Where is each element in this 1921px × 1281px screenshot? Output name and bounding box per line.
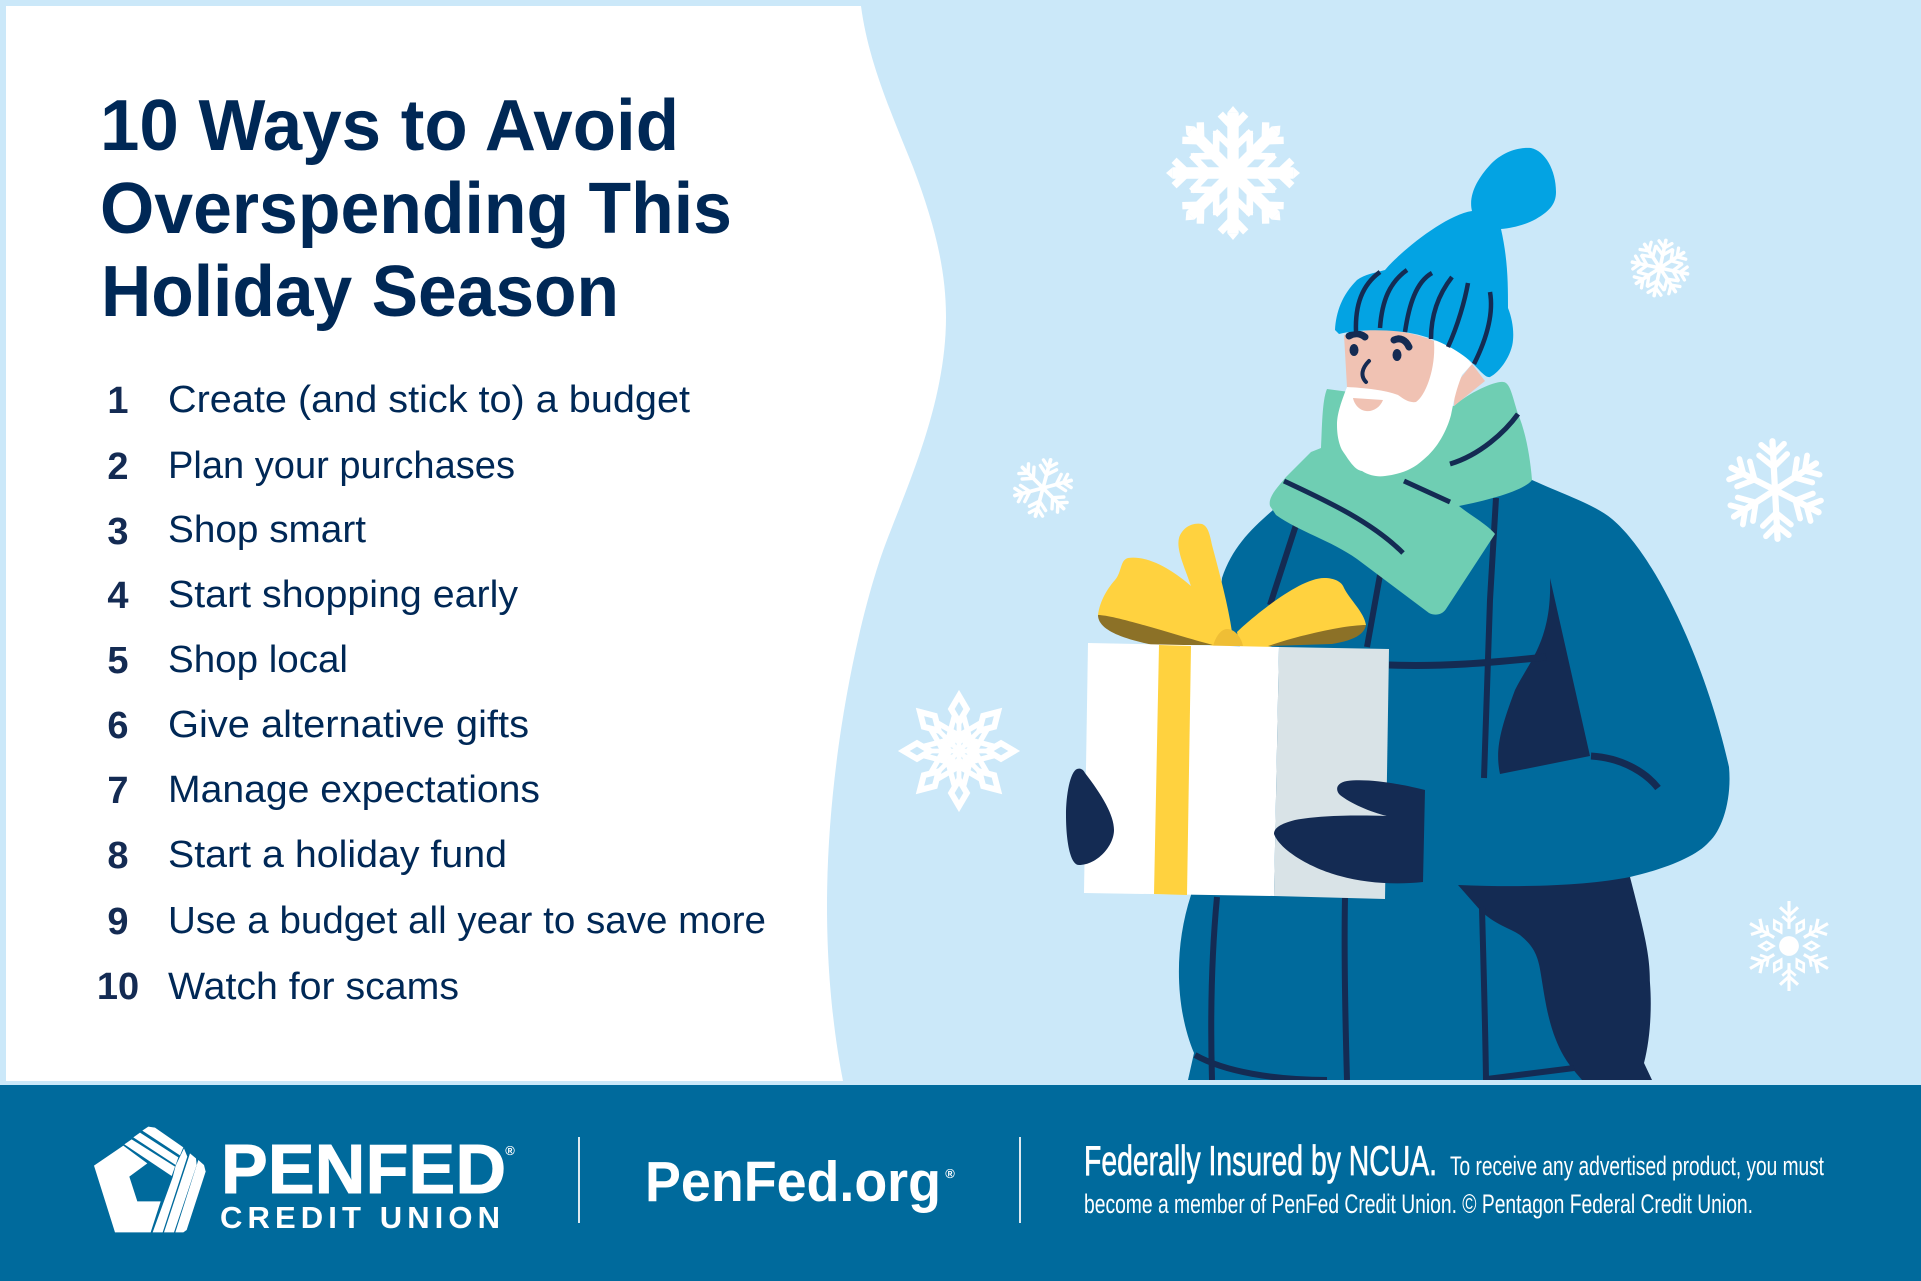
item 1: Create (and stick to) a budget: [168, 379, 690, 421]
hat: [1335, 148, 1556, 377]
coat seams: [1195, 498, 1658, 1080]
face: [1344, 330, 1434, 402]
registered mark: ®: [505, 1143, 515, 1158]
title: 10 Ways to Avoid: [100, 86, 679, 166]
illustration: man with gift: [1066, 148, 1730, 1080]
item 4: 4: [107, 575, 129, 617]
title: [100, 86, 732, 332]
mitten: left hand: [1066, 769, 1114, 865]
coat shadow inner arm: [1498, 578, 1590, 774]
item 8: Start a holiday fund: [168, 834, 507, 876]
footer band: [0, 1085, 1921, 1281]
item 7: 7: [107, 770, 129, 812]
item 9: 9: [107, 901, 129, 943]
item 7: Manage expectations: [168, 769, 540, 811]
item 10: 10: [97, 966, 139, 1008]
bow: [1098, 524, 1366, 647]
mitten: right hand: [1274, 780, 1425, 883]
title: Holiday Season: [101, 252, 619, 332]
snowflake: large top: [1166, 106, 1300, 240]
item 4: Start shopping early: [168, 574, 518, 616]
website: PenFed.org: [645, 1150, 941, 1214]
hat ribs: [1356, 270, 1491, 364]
coat: [1179, 470, 1730, 1080]
item 2: 2: [107, 446, 129, 488]
item 5: 5: [107, 640, 129, 682]
beard: [1337, 340, 1472, 476]
disclaimer: Federally Insured by NCUA.: [1084, 1137, 1437, 1184]
snowflake: right: [1723, 439, 1827, 541]
snowflake: lattice left: [904, 696, 1014, 806]
divider right: [1019, 1137, 1021, 1223]
disclaimer: [1084, 1137, 1824, 1219]
item 3: Shop smart: [168, 509, 366, 551]
item 10: Watch for scams: [168, 966, 459, 1008]
eyes and brows: [1349, 334, 1409, 382]
logo: PenFed: [94, 1127, 515, 1235]
snowflake: dot centre bottom right: [1741, 901, 1837, 991]
coat shadow under arm: [1458, 877, 1652, 1080]
website: ®: [945, 1166, 955, 1181]
logo subline: CREDIT UNION: [220, 1200, 500, 1235]
snowflake: small top right: [1627, 235, 1693, 301]
item 8: 8: [107, 835, 129, 877]
title: Overspending This: [100, 169, 732, 249]
item 6: 6: [107, 705, 129, 747]
logo icon: [94, 1127, 206, 1232]
gift box: [1084, 643, 1389, 899]
scarf folds: [1284, 414, 1518, 553]
item 5: Shop local: [168, 639, 348, 681]
neck and ear: [1454, 364, 1485, 406]
scarf: [1270, 382, 1532, 615]
item 9: Use a budget all year to save more: [168, 900, 766, 942]
mouth: [1353, 398, 1383, 411]
logo wordmark: PENFED: [221, 1130, 506, 1208]
item 3: 3: [107, 511, 129, 553]
divider left: [578, 1137, 580, 1223]
panel: white text area: [6, 6, 946, 1081]
item 6: Give alternative gifts: [168, 704, 529, 746]
item 2: Plan your purchases: [168, 445, 515, 487]
item 1: 1: [107, 380, 129, 422]
snowflake: small left: [1007, 452, 1079, 524]
list: ten ways: [97, 379, 766, 1008]
